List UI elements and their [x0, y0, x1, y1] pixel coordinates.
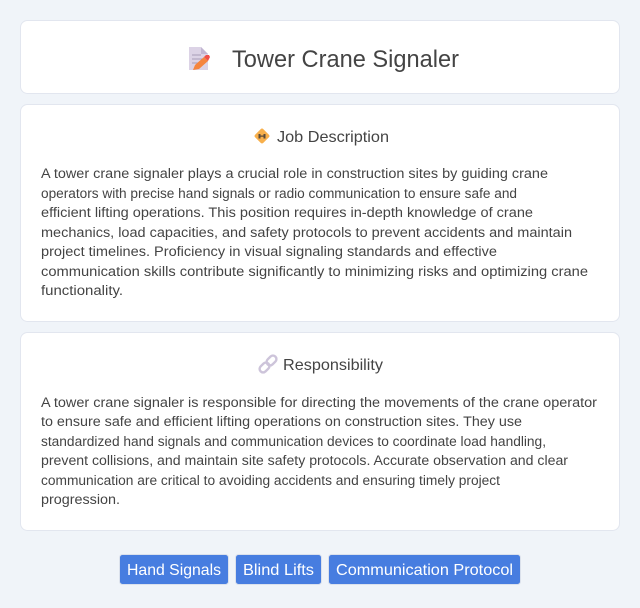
- tag: communication protocol: [328, 554, 520, 584]
- text block: job description: operators with precise hand signals or radio communication to ensure safe and: [41, 186, 517, 202]
- text block: job description: [41, 166, 588, 299]
- heading: responsibility: Responsibility: [283, 357, 383, 374]
- tag: blind lifts: [236, 554, 322, 584]
- text block: responsibility: prevent collisions, and maintain site safety protocols. Accurate observation and clear: [41, 453, 568, 469]
- heading: job description: Job Description: [277, 129, 389, 146]
- icon: document with pencil: [189, 47, 210, 70]
- text block: job description: communication skills contribute significantly to minimizing risks and optimizing crane: [41, 264, 588, 280]
- text block: job description: project timelines. Proficiency in visual signaling standards and effective: [41, 244, 497, 260]
- text block: responsibility: progression.: [41, 492, 120, 508]
- text block: responsibility: to ensure safe and efficient lifting operations on construction sites. They use: [41, 414, 522, 430]
- text block: job description: functionality.: [41, 283, 123, 299]
- text block: responsibility: communication are critical to avoiding accidents and ensuring timely project: [41, 473, 500, 489]
- icon: chain link: [258, 354, 278, 374]
- title: Tower Crane Signaler: [232, 46, 459, 73]
- text block: responsibility: standardized hand signals and communication devices to coordinate load handling,: [41, 434, 546, 450]
- text block: responsibility: A tower crane signaler is responsible for directing the movements of the crane operator: [41, 395, 597, 411]
- text block: job description: efficient lifting operations. This position requires in-depth knowledge of crane: [41, 205, 533, 221]
- icon: road sign: [254, 128, 270, 144]
- tag: hand signals: Hand Signals: [127, 562, 221, 579]
- panel: responsibility: [20, 332, 620, 530]
- panel: title card: [20, 20, 620, 94]
- text block: job description: A tower crane signaler plays a crucial role in construction sites by guiding crane: [41, 166, 548, 182]
- text block: responsibility: [41, 395, 597, 508]
- tag: hand signals: [120, 554, 228, 584]
- text block: job description: mechanics, load capacities, and safety protocols to prevent accidents and maintain: [41, 225, 572, 241]
- tag: communication protocol: Communication Protocol: [336, 562, 513, 579]
- panel: job description: [20, 104, 620, 322]
- tag: blind lifts: Blind Lifts: [243, 562, 314, 579]
